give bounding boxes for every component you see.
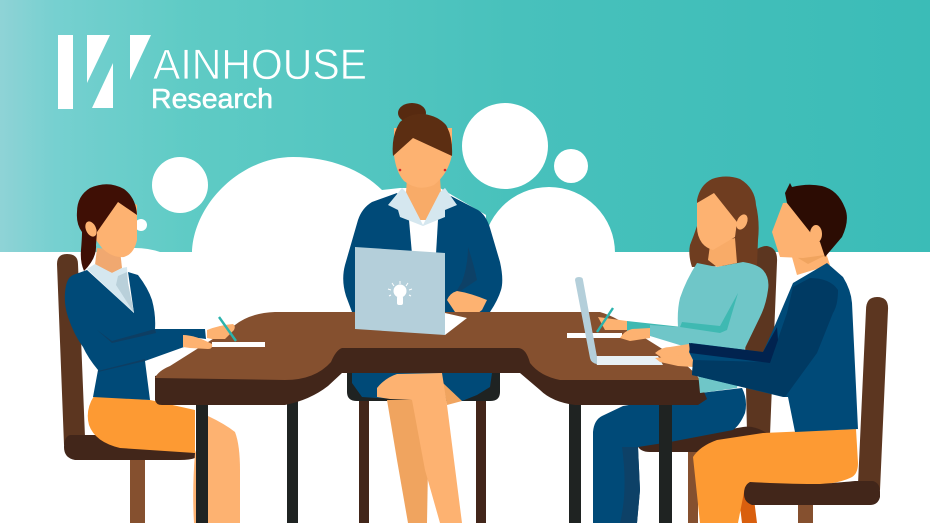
dark inner leg bbox=[738, 483, 757, 523]
chair bbox=[57, 254, 195, 523]
man bbox=[655, 183, 880, 523]
right chair behind second woman bbox=[637, 246, 777, 523]
left chair and woman bbox=[57, 184, 240, 523]
neck bbox=[406, 178, 441, 226]
left pen bbox=[219, 317, 236, 341]
neck bbox=[790, 250, 830, 275]
skirt bbox=[352, 373, 492, 401]
jacket fold bbox=[97, 329, 156, 372]
back arm bbox=[627, 321, 682, 333]
laptop lid bbox=[355, 247, 445, 335]
laptop base bbox=[593, 356, 663, 365]
ear bbox=[810, 225, 822, 243]
teal background band bbox=[0, 0, 930, 252]
face bbox=[697, 193, 737, 250]
jacket bbox=[343, 193, 502, 312]
earrings bbox=[399, 169, 446, 171]
right woman bbox=[597, 176, 768, 393]
logo bbox=[58, 35, 367, 114]
table legs bbox=[196, 400, 672, 523]
table edge bbox=[155, 340, 707, 405]
right woman trousers bbox=[593, 388, 746, 523]
sweater bbox=[650, 262, 768, 393]
thought clouds bbox=[118, 103, 615, 319]
sleeve bbox=[692, 278, 838, 397]
logo subtitle: Research bbox=[151, 83, 273, 114]
face bbox=[394, 128, 452, 188]
logo wordmark: AINHOUSE bbox=[153, 41, 367, 89]
hand bbox=[447, 291, 487, 317]
ear bbox=[734, 213, 750, 231]
middle woman's chair bbox=[347, 373, 500, 523]
collar bbox=[87, 264, 134, 313]
ear bbox=[83, 220, 99, 238]
icon: light bulb bbox=[388, 281, 412, 305]
side laptop bbox=[575, 277, 663, 365]
table bbox=[155, 247, 707, 523]
table top bbox=[155, 312, 700, 380]
neck bbox=[708, 238, 737, 267]
neck bbox=[95, 248, 122, 273]
hair bun bbox=[398, 103, 426, 123]
hair bbox=[689, 176, 759, 267]
legs and skirt bbox=[193, 416, 240, 523]
seat bbox=[744, 481, 880, 505]
left woman's hands bbox=[183, 324, 235, 349]
jacket fold bbox=[448, 247, 477, 305]
sleeve cuff shade bbox=[689, 327, 778, 363]
knee shadow bbox=[443, 383, 462, 405]
hair bbox=[77, 184, 137, 271]
trousers bbox=[693, 429, 858, 523]
jacket bbox=[65, 270, 206, 400]
lower hand bbox=[620, 328, 650, 341]
face bbox=[772, 200, 835, 258]
shirt bbox=[409, 220, 438, 254]
neck shadow bbox=[798, 248, 824, 264]
hair bbox=[393, 114, 452, 156]
front laptop bbox=[355, 247, 467, 335]
hair bbox=[785, 183, 847, 257]
left paper bbox=[212, 342, 265, 347]
back leg bbox=[387, 400, 428, 523]
jacket bbox=[689, 263, 858, 432]
sweater fold bbox=[680, 293, 738, 333]
collar shade bbox=[116, 272, 134, 313]
pen bbox=[597, 308, 613, 332]
laptop screen bbox=[575, 277, 597, 364]
paper under laptop bbox=[445, 313, 467, 335]
upper hand bbox=[598, 317, 627, 330]
middle woman bbox=[343, 103, 502, 523]
front leg bbox=[377, 373, 462, 523]
collar bbox=[388, 188, 457, 226]
logo mark bbox=[58, 35, 151, 109]
face bbox=[90, 195, 137, 257]
hands bbox=[655, 344, 693, 367]
right paper bbox=[567, 333, 622, 338]
right chair bbox=[798, 297, 888, 523]
